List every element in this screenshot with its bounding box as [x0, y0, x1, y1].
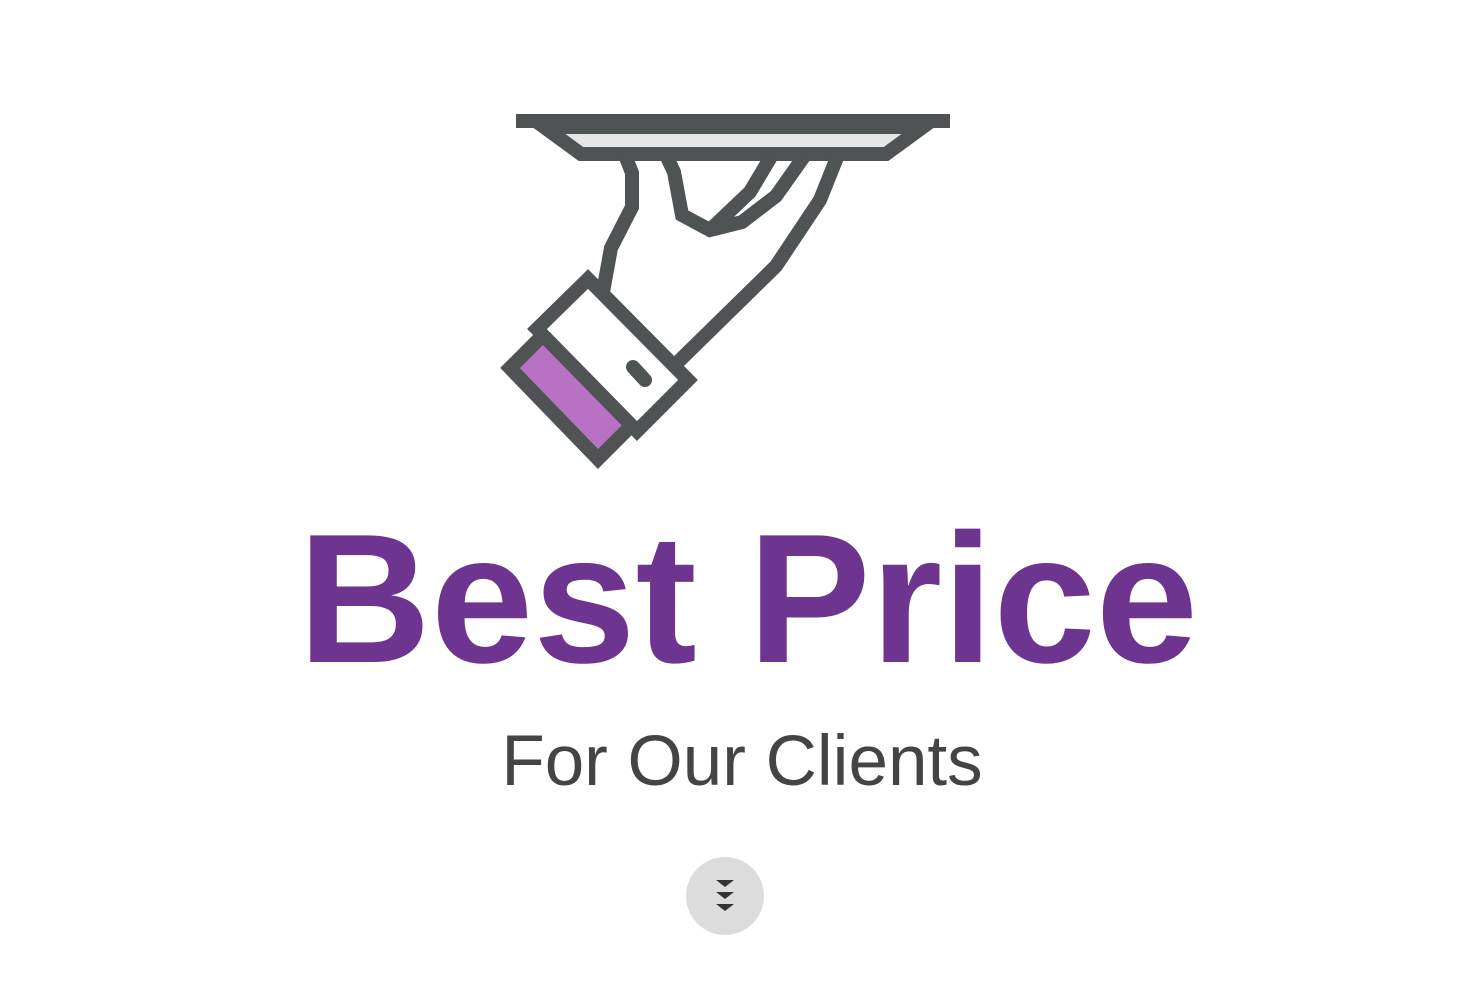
- icon: hand holding tray: [510, 114, 950, 459]
- subtitle: For Our Clients: [501, 722, 983, 801]
- hand: [540, 155, 838, 432]
- tray: [516, 114, 950, 154]
- scroll down button: [686, 857, 764, 935]
- cuff: [510, 279, 688, 459]
- title: Best Price: [298, 495, 1198, 701]
